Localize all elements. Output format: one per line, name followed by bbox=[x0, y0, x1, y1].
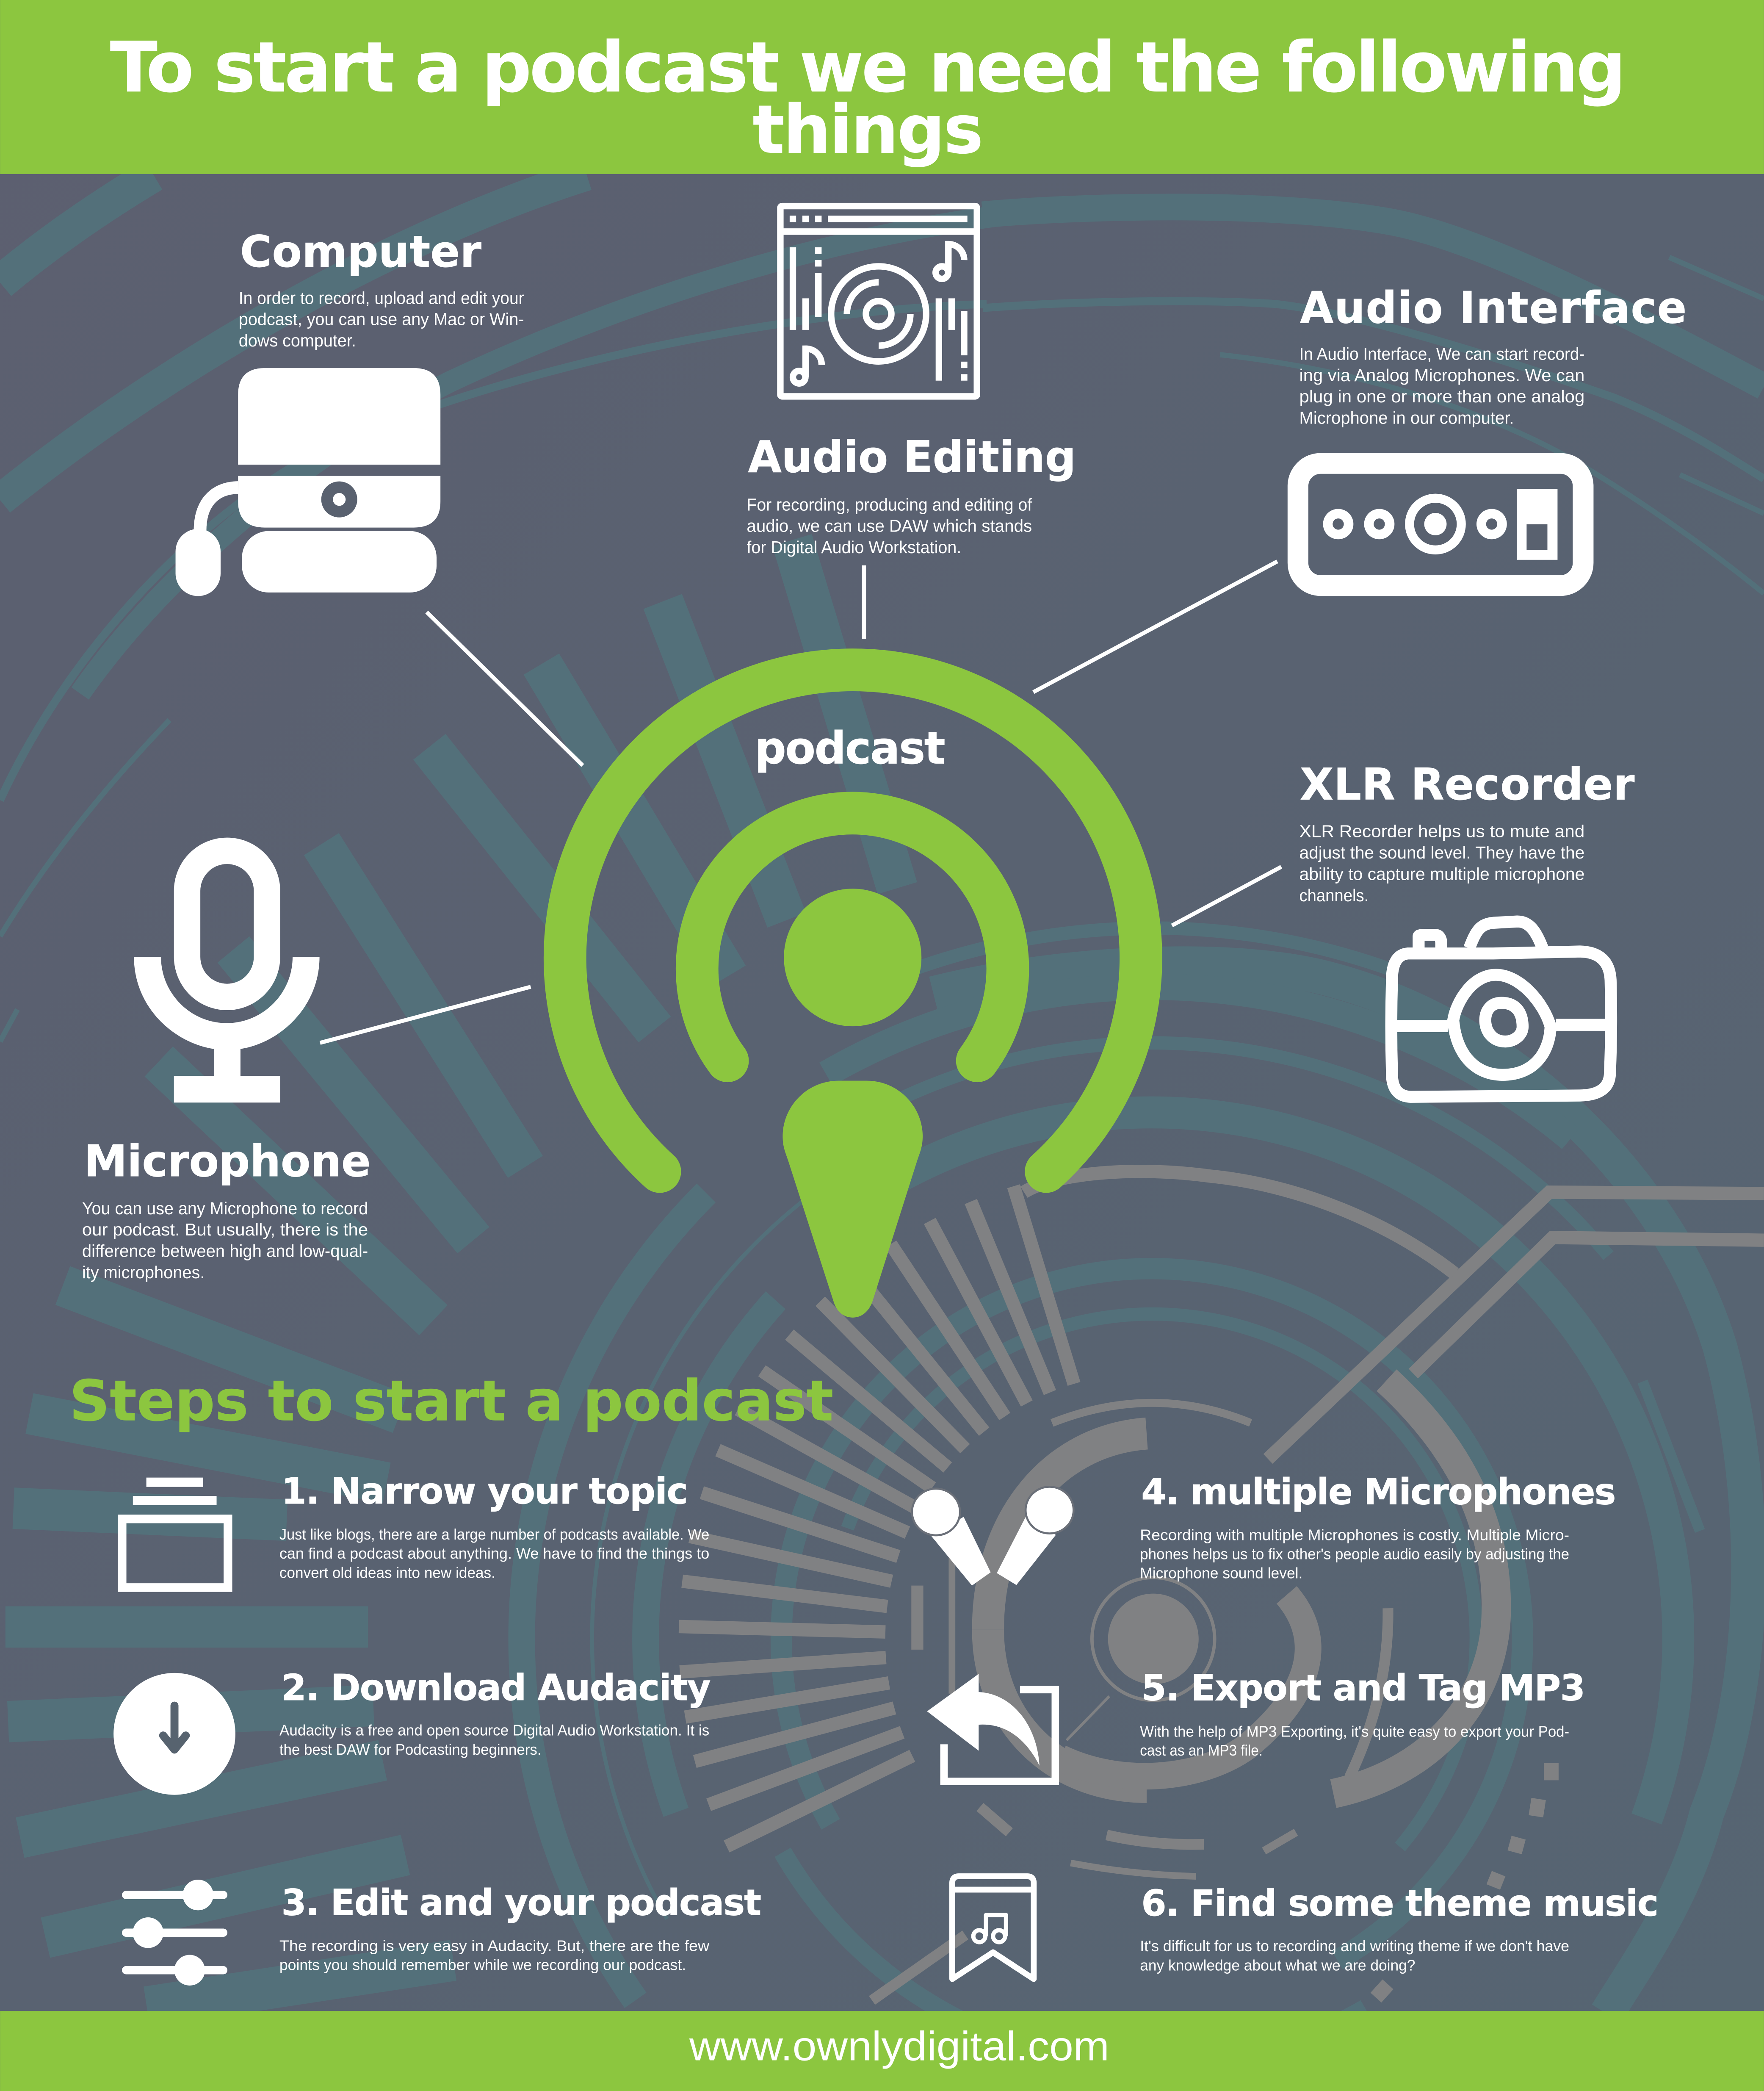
icon: music bookmark bbox=[952, 1876, 1034, 1979]
step 4 text: phones helps us to fix other's people audio easily by adjusting the bbox=[1140, 1545, 1569, 1562]
text: audio editing description bbox=[747, 495, 1032, 557]
text: audio interface description: ing via Analog Microphones. We can bbox=[1299, 366, 1584, 385]
panel: audio interface bbox=[1298, 283, 1687, 586]
footer band bbox=[0, 2011, 1764, 2091]
text: XLR recorder description: ability to capture multiple microphone bbox=[1299, 864, 1584, 883]
text: computer description: In order to record, upload and edit your bbox=[239, 288, 524, 307]
text: XLR recorder description: adjust the sound level. They have the bbox=[1299, 843, 1584, 862]
icon: sliders bbox=[126, 1880, 223, 1986]
step 6 heading: 6. Find some theme music bbox=[1141, 1883, 1659, 1925]
step 2 heading: 2. Download Audacity bbox=[282, 1667, 711, 1709]
icon: computer bbox=[176, 368, 440, 596]
text: audio interface description: plug in one or more than one analog bbox=[1299, 387, 1584, 406]
step 2 text: Audacity is a free and open source Digital Audio Workstation. It is bbox=[279, 1722, 709, 1739]
step 1 bbox=[122, 1471, 709, 1587]
footer url: www.ownlydigital.com bbox=[689, 2023, 1109, 2069]
icon: audio editing turntable bbox=[780, 206, 977, 396]
step 6 bbox=[952, 1876, 1659, 1979]
step 6 text: any knowledge about what we are doing? bbox=[1140, 1957, 1415, 1974]
step 4 text: Microphone sound level. bbox=[1140, 1565, 1302, 1582]
text: audio interface description: Microphone in our computer. bbox=[1299, 408, 1514, 428]
panel: microphone bbox=[82, 851, 371, 1282]
icon: central podcast symbol bbox=[565, 670, 1141, 1318]
text: XLR recorder description: channels. bbox=[1299, 886, 1369, 905]
step 1 text bbox=[279, 1526, 709, 1581]
text: microphone description bbox=[82, 1199, 368, 1282]
title: things bbox=[753, 91, 983, 169]
step 1 text: can find a podcast about anything. We have to find the things to bbox=[279, 1545, 709, 1562]
text: microphone description: our podcast. But usually, there is the bbox=[82, 1220, 368, 1239]
icon: export arrow bbox=[927, 1674, 1055, 1781]
step 4 bbox=[912, 1471, 1616, 1586]
step 2 text: the best DAW for Podcasting beginners. bbox=[279, 1741, 542, 1758]
heading: microphone: Microphone bbox=[84, 1136, 371, 1187]
text: audio interface description bbox=[1299, 344, 1584, 428]
icon: stack box bbox=[122, 1478, 228, 1587]
text: computer description: podcast, you can use any Mac or Win- bbox=[239, 310, 524, 329]
step 4 text: Recording with multiple Microphones is costly. Multiple Micro- bbox=[1140, 1526, 1569, 1544]
title bbox=[110, 27, 1626, 169]
text: XLR recorder description bbox=[1299, 822, 1584, 905]
heading: steps: Steps to start a podcast bbox=[69, 1368, 833, 1434]
heading: audio interface: Audio Interface bbox=[1300, 283, 1687, 333]
text: audio editing description: for Digital Audio Workstation. bbox=[747, 537, 961, 557]
text: audio editing description: For recording, producing and editing of bbox=[747, 495, 1032, 514]
step 5 heading: 5. Export and Tag MP3 bbox=[1141, 1667, 1585, 1709]
connector lines bbox=[320, 562, 1281, 1043]
heading: audio editing: Audio Editing bbox=[748, 432, 1076, 483]
text: XLR recorder description: XLR Recorder helps us to mute and bbox=[1299, 822, 1584, 841]
text: microphone description: You can use any Microphone to record bbox=[82, 1199, 368, 1218]
step 6 text: It's difficult for us to recording and writing theme if we don't have bbox=[1140, 1937, 1569, 1955]
icon: camera bbox=[1391, 922, 1611, 1097]
header band bbox=[0, 0, 1764, 174]
step 5 text: cast as an MP3 file. bbox=[1140, 1742, 1263, 1759]
step 1 heading: 1. Narrow your topic bbox=[282, 1471, 688, 1512]
step 1 text: Just like blogs, there are a large number of podcasts available. We bbox=[279, 1526, 709, 1543]
step 4 heading: 4. multiple Microphones bbox=[1141, 1471, 1616, 1513]
step 3 text: The recording is very easy in Audacity. But, there are the few bbox=[279, 1937, 710, 1954]
icon: microphone bbox=[134, 851, 320, 1102]
step 2 bbox=[113, 1667, 711, 1795]
title: To start a podcast we need the following bbox=[110, 27, 1626, 108]
step 5 text: With the help of MP3 Exporting, it's quite easy to export your Pod- bbox=[1140, 1723, 1569, 1740]
heading: computer: Computer bbox=[240, 227, 481, 277]
step 5 text bbox=[1140, 1723, 1569, 1759]
icon: download bbox=[113, 1673, 235, 1795]
text: microphone description: difference between high and low-qual- bbox=[82, 1241, 368, 1261]
icon: audio interface bbox=[1298, 463, 1583, 586]
label: podcast: podcast bbox=[755, 723, 946, 774]
icon: two microphones bbox=[912, 1487, 1073, 1586]
step 3 text: points you should remember while we recording our podcast. bbox=[279, 1956, 686, 1973]
text: computer description bbox=[239, 288, 524, 350]
text: microphone description: ity microphones. bbox=[82, 1263, 205, 1282]
step 3 text bbox=[279, 1937, 710, 1973]
step 5 bbox=[927, 1667, 1585, 1781]
step 6 text bbox=[1140, 1937, 1569, 1974]
panel: computer bbox=[176, 227, 524, 596]
text: computer description: dows computer. bbox=[239, 331, 356, 350]
text: audio editing description: audio, we can use DAW which stands bbox=[747, 516, 1032, 536]
step 3 heading: 3. Edit and your podcast bbox=[282, 1882, 761, 1924]
panel: XLR recorder bbox=[1299, 760, 1635, 1097]
panel: audio editing bbox=[747, 206, 1076, 557]
step 3 bbox=[126, 1880, 761, 1986]
text: audio interface description: In Audio Interface, We can start record- bbox=[1299, 344, 1584, 363]
step 2 text bbox=[279, 1722, 709, 1758]
step 4 text bbox=[1140, 1526, 1569, 1582]
step 1 text: convert old ideas into new ideas. bbox=[279, 1564, 495, 1581]
heading: XLR recorder: XLR Recorder bbox=[1300, 760, 1635, 810]
